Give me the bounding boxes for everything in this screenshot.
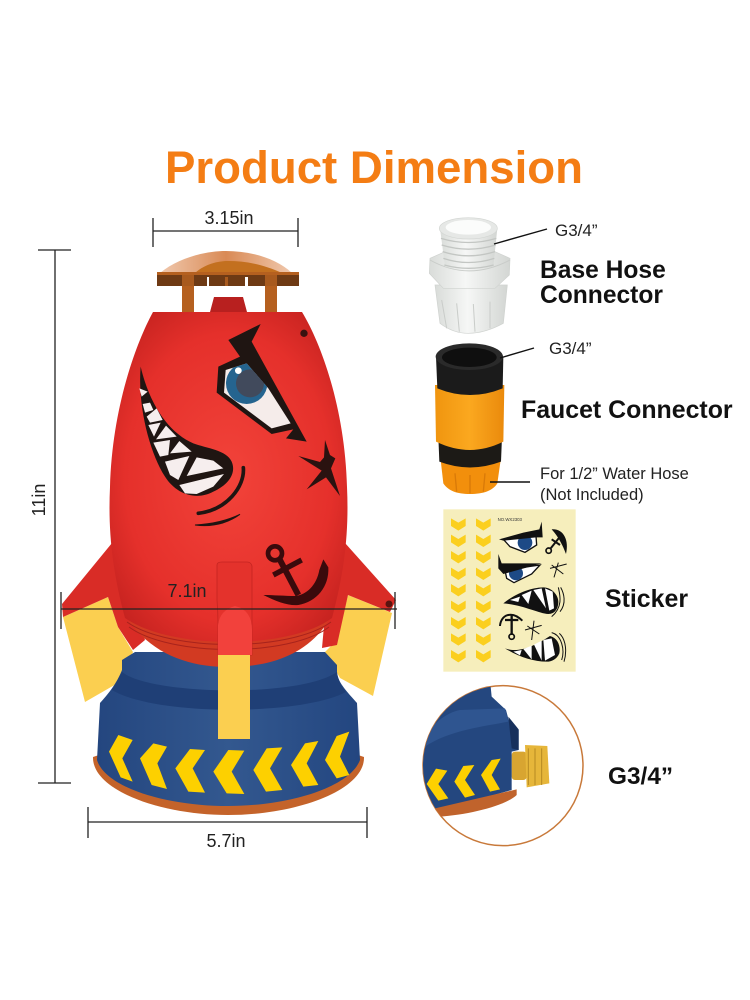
title: Product Dimension — [165, 142, 583, 193]
anchor — [263, 546, 328, 605]
face: eye — [217, 324, 307, 442]
base chevrons — [109, 732, 349, 794]
sticker anchors and scars — [500, 529, 567, 640]
dimension: 11in height — [29, 250, 71, 783]
water hose pointer — [490, 481, 530, 483]
label: G3/4 second: G3/4” — [549, 339, 592, 358]
label: sticker: Sticker — [605, 585, 688, 613]
label: G3/4 port: G3/4” — [608, 763, 673, 790]
detail chevrons — [427, 759, 501, 801]
faucet connector pointer — [500, 348, 534, 358]
sticker mouths — [503, 587, 566, 662]
label: base hose connector: Base Hose — [540, 257, 666, 284]
dimension: 3.15in width — [153, 208, 298, 247]
face: scar — [298, 330, 340, 496]
sticker chevrons — [451, 518, 491, 662]
dimension: 5.7in base — [88, 807, 367, 851]
center fin — [217, 562, 252, 739]
label: G3/4 top: G3/4” — [555, 221, 598, 240]
sticker sheet — [443, 509, 576, 672]
dimension: 7.1in span — [61, 581, 397, 629]
rocket product illustration — [62, 251, 396, 815]
right fin — [322, 543, 396, 696]
label: water hose note: For 1/2” Water Hose — [540, 465, 689, 483]
rocket body — [110, 312, 347, 667]
face: mouth — [139, 367, 243, 526]
label: base hose connector: Connector — [540, 282, 663, 309]
dimension: 3.15in width: 3.15in — [204, 208, 254, 228]
base — [93, 652, 364, 815]
base port detail circle — [422, 684, 584, 846]
brass port — [512, 745, 549, 787]
dimension: 5.7in base: 5.7in — [206, 831, 246, 851]
label: faucet connector: Faucet Connector — [521, 396, 733, 424]
sticker eyes — [498, 522, 543, 583]
left fin — [62, 543, 145, 702]
cap — [157, 251, 299, 312]
dimension: 7.1in span: 7.1in — [167, 581, 207, 601]
base hose connector pointer — [494, 229, 547, 244]
sticker code: NO.WX2303 — [498, 517, 523, 522]
faucet connector icon — [435, 343, 504, 494]
dimension: 11in height: 11in — [29, 484, 49, 516]
blue base section — [423, 686, 519, 808]
label: water hose note: (Not Included) — [540, 486, 644, 504]
base hose connector icon — [429, 218, 510, 333]
